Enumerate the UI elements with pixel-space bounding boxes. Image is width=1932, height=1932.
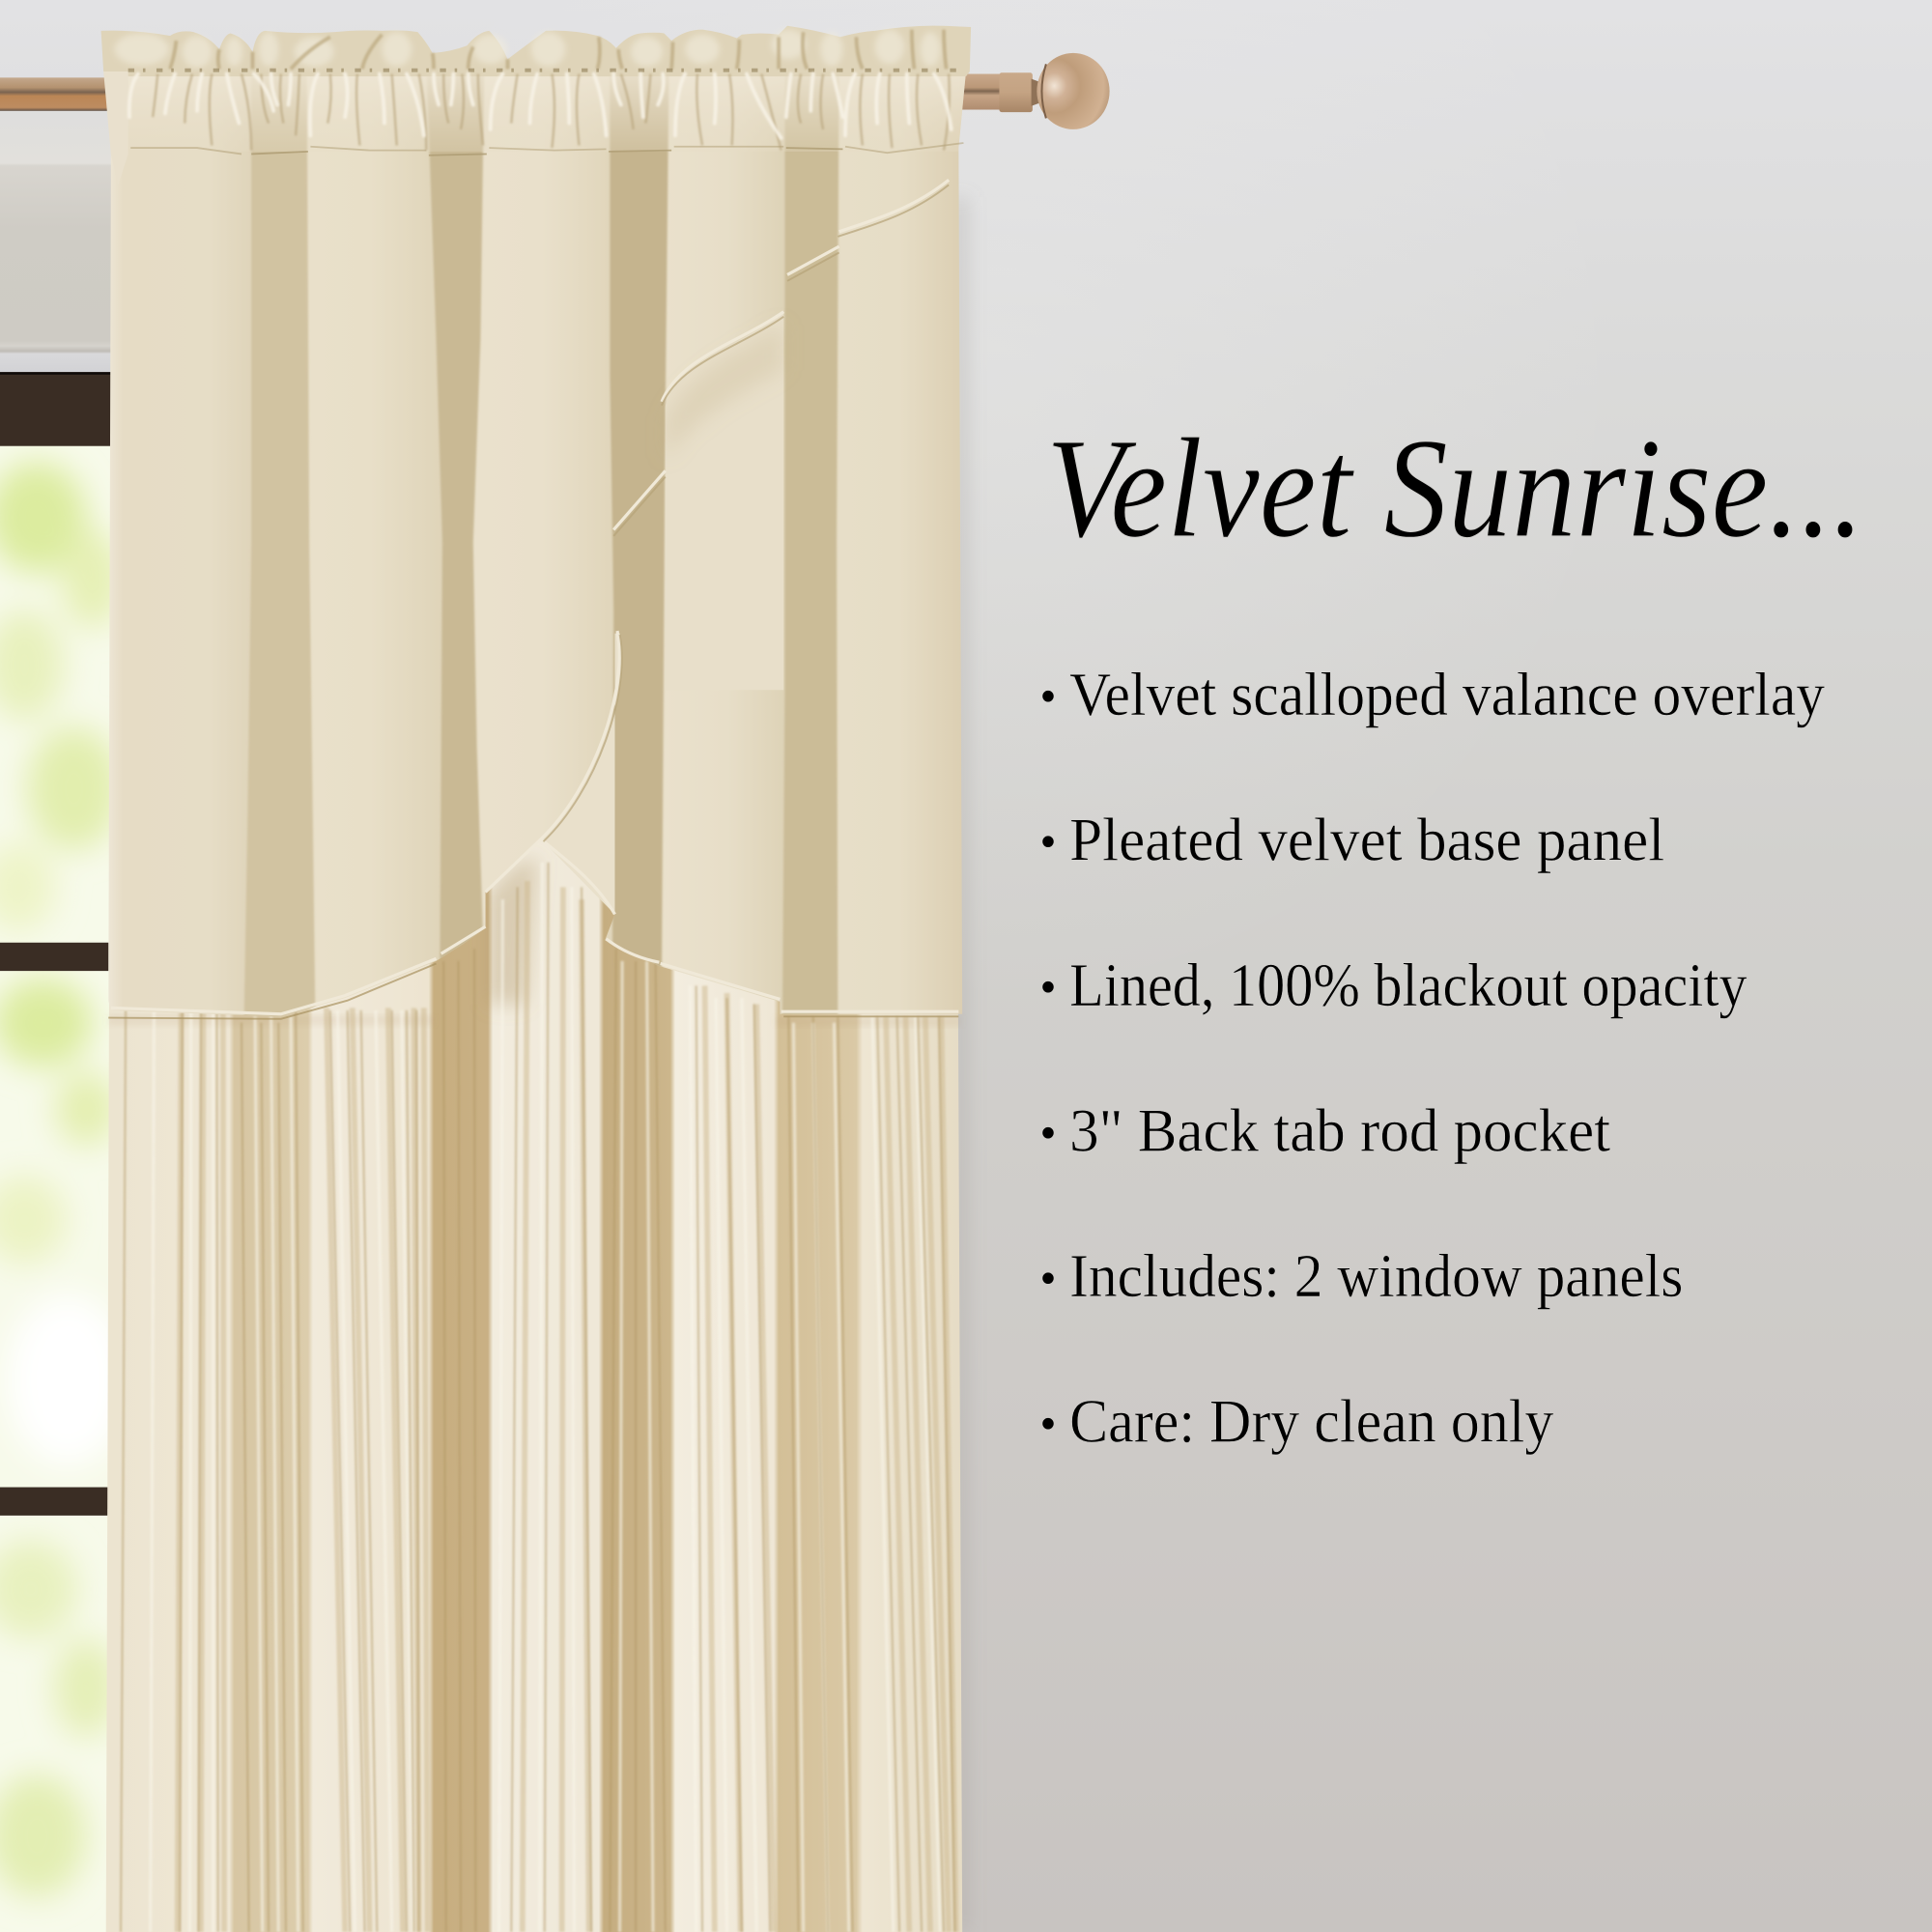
feature: care dry clean only: Care: Dry clean only xyxy=(1069,1386,1554,1455)
feature: back tab rod pocket: • xyxy=(1040,1108,1056,1159)
feature: lined blackout opacity: • xyxy=(1040,962,1056,1013)
title: Velvet Sunrise... xyxy=(1046,410,1864,568)
feature: back tab rod pocket: 3" Back tab rod pocket xyxy=(1069,1095,1610,1164)
feature: includes 2 window panels: • xyxy=(1040,1253,1056,1304)
window with trim and garden view xyxy=(0,164,111,1932)
feature: care dry clean only: • xyxy=(1040,1399,1056,1450)
feature: velvet scalloped valance overlay: Velvet scalloped valance overlay xyxy=(1069,660,1825,728)
gathered rod pocket header xyxy=(101,26,971,185)
feature: velvet scalloped valance overlay: • xyxy=(1040,671,1056,723)
feature: lined blackout opacity: Lined, 100% blackout opacity xyxy=(1069,951,1747,1019)
hem highlights xyxy=(111,180,958,1014)
feature: pleated velvet base panel: • xyxy=(1040,817,1056,868)
pleated base panel xyxy=(106,838,962,1932)
left side hem strip xyxy=(103,71,128,185)
feature: includes 2 window panels: Includes: 2 window panels xyxy=(1069,1241,1683,1310)
gather seam xyxy=(128,69,956,71)
tip overlap highlight xyxy=(578,634,622,911)
ruffle highlights xyxy=(115,30,940,68)
curtain rod with finial xyxy=(0,53,1110,129)
velvet scalloped valance overlay xyxy=(99,62,974,1035)
ruffle shadows xyxy=(170,30,947,69)
stitch line xyxy=(130,143,963,156)
broad pleat stripes xyxy=(178,881,956,1932)
feature list xyxy=(1040,660,1825,1455)
feature: pleated velvet base panel: Pleated velvet base panel xyxy=(1069,805,1664,873)
fold shadows xyxy=(244,62,839,1023)
gather folds xyxy=(153,74,950,151)
